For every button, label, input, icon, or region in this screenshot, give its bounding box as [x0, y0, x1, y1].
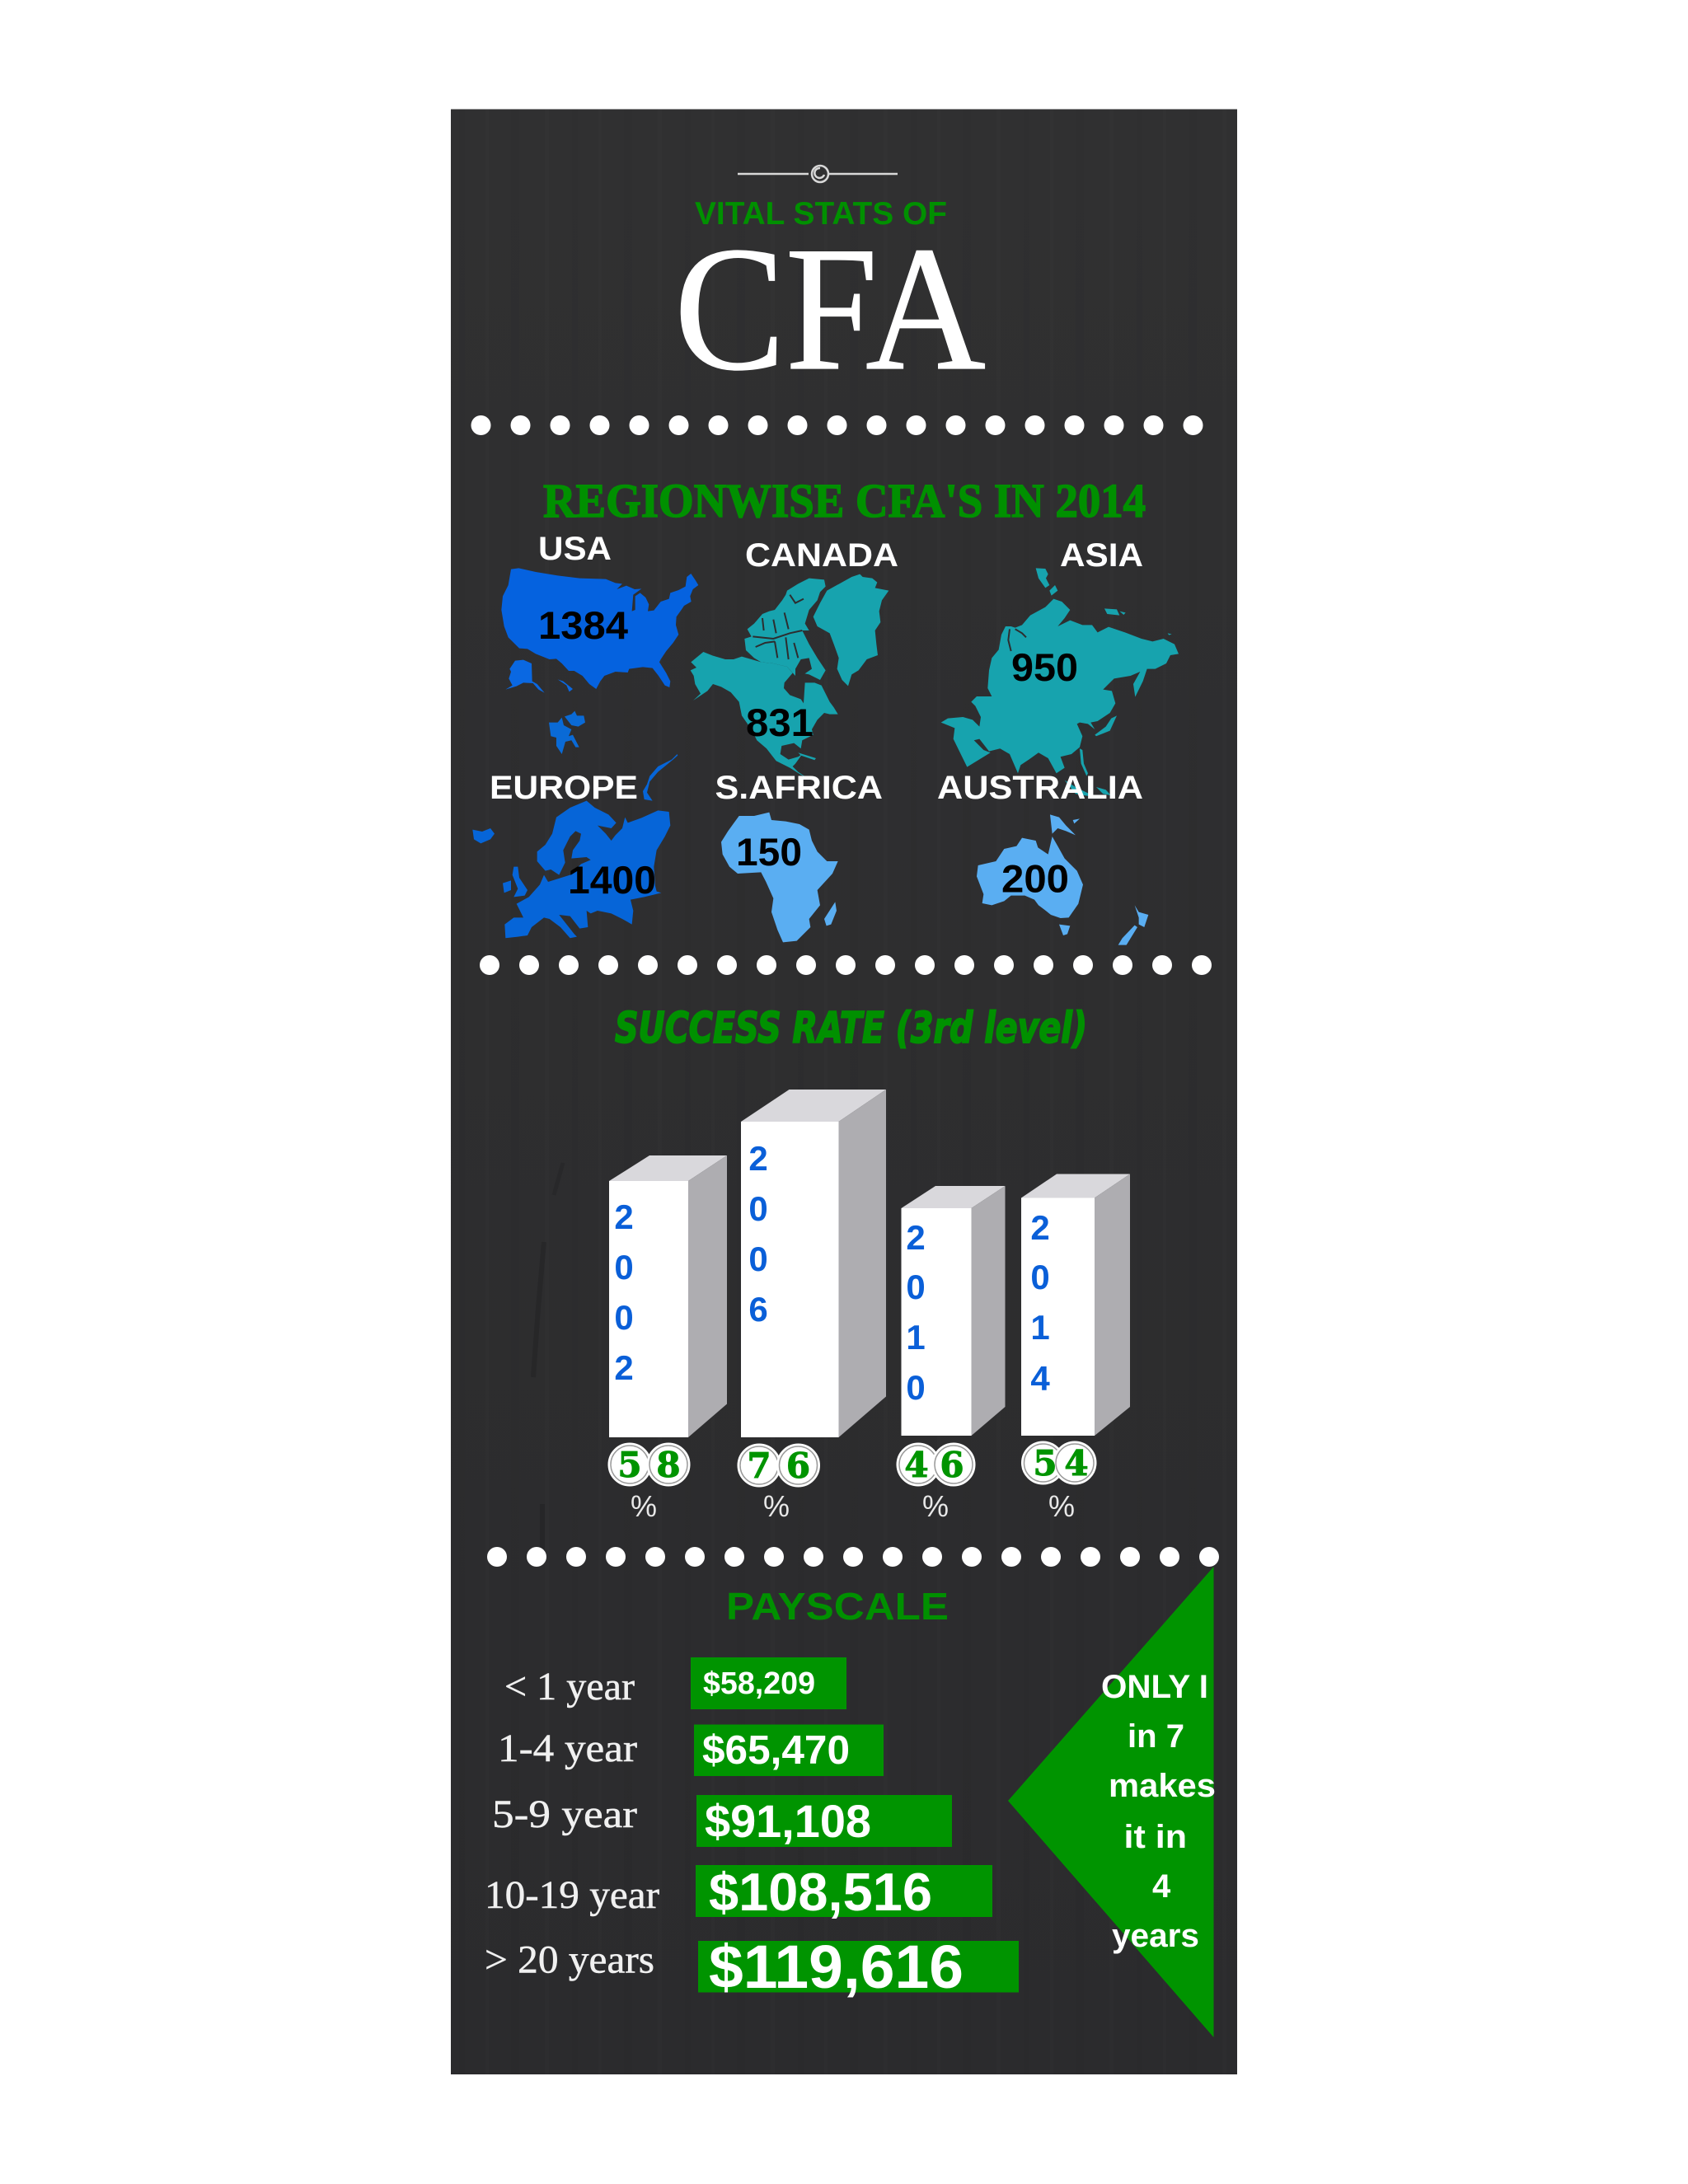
region labels	[490, 531, 1143, 806]
region values: 831	[746, 701, 814, 744]
ornament: line with swirl	[738, 166, 898, 182]
percent signs: %	[1048, 1489, 1075, 1523]
row: under 1 year: < 1 year	[504, 1665, 635, 1708]
row: over 20 years	[485, 1933, 1019, 2001]
map: Asia	[941, 568, 1179, 797]
region values: 950	[1011, 645, 1078, 689]
bar: 2010: 2	[906, 1218, 926, 1257]
percent badge: 54: 5	[1033, 1443, 1057, 1483]
region values: 200	[1001, 857, 1069, 900]
region labels: EUROPE	[490, 770, 638, 806]
percent signs: %	[763, 1489, 790, 1523]
percent signs: %	[922, 1489, 949, 1523]
row: over 20 years: > 20 years	[485, 1938, 654, 1981]
bar: 2002: 0	[614, 1298, 634, 1337]
callout text: years	[1112, 1918, 1199, 1954]
percent badge: 76	[738, 1444, 819, 1487]
percent badge: 76: 6	[786, 1446, 810, 1486]
row: 1-4 year: 1-4 year	[498, 1727, 637, 1770]
map: Australia	[977, 814, 1148, 945]
row: 1-4 year	[498, 1724, 884, 1776]
row: 5-9 year: 5-9 year	[492, 1793, 637, 1836]
bar: 2006	[741, 1090, 886, 1437]
callout text: ONLY I	[1101, 1669, 1208, 1705]
bar: 2006: 0	[748, 1189, 768, 1228]
bar: 2010	[902, 1186, 1006, 1436]
row: 5-9 year	[492, 1793, 952, 1847]
region values: 1384	[538, 603, 628, 647]
bar: 2002: 0	[614, 1248, 634, 1286]
row: 10-19 year: 10-19 year	[485, 1873, 659, 1917]
map: Europe	[472, 754, 678, 938]
percent badge: 58	[608, 1443, 690, 1486]
callout text	[1101, 1669, 1216, 1954]
bar: 2010: 1	[906, 1318, 926, 1357]
percent badge: 46: 4	[904, 1445, 929, 1485]
row: 10-19 year	[485, 1862, 992, 1922]
callout text: in 7	[1128, 1718, 1184, 1755]
region values	[538, 603, 1078, 902]
callout text: 4	[1152, 1868, 1171, 1905]
percent badge: 54	[1022, 1441, 1096, 1484]
percent badge: 46: 6	[940, 1445, 964, 1485]
region labels: CANADA	[745, 537, 898, 574]
bar: 2002	[609, 1155, 727, 1437]
bar: 2002: 2	[614, 1197, 634, 1236]
percent badge: 58: 5	[617, 1445, 642, 1485]
bar: 2014: 2	[1030, 1208, 1050, 1247]
region labels: USA	[538, 531, 612, 567]
region labels: S.AFRICA	[715, 770, 883, 806]
callout text: it in	[1124, 1819, 1187, 1855]
divider: dotted row 2	[480, 955, 1212, 975]
percent signs: %	[631, 1489, 657, 1523]
row: under 1 year: $58,209	[703, 1666, 815, 1700]
row: over 20 years: $119,616	[709, 1933, 964, 2001]
heading: payscale: PAYSCALE	[726, 1585, 949, 1628]
row: under 1 year	[504, 1657, 846, 1709]
callout text: makes	[1109, 1768, 1216, 1804]
bar: 2002: 2	[614, 1348, 634, 1387]
region labels: ASIA	[1060, 537, 1143, 574]
region values: 150	[736, 830, 802, 874]
row: 10-19 year: $108,516	[709, 1862, 932, 1922]
callout: green arrow triangle	[1008, 1567, 1213, 2037]
region values: 1400	[568, 858, 656, 902]
heading: regionwise: REGIONWISE CFA'S IN 2014	[543, 474, 1146, 527]
percent badge: 46	[897, 1443, 975, 1486]
percent signs	[631, 1489, 1075, 1523]
percent badge: 76: 7	[747, 1446, 771, 1486]
bar: 2010: 0	[906, 1268, 926, 1306]
map: USA	[501, 568, 698, 754]
percent badge: 58: 8	[656, 1445, 681, 1485]
bar: 2006: 6	[748, 1290, 768, 1329]
region labels: AUSTRALIA	[937, 770, 1143, 806]
bar: 2010: 0	[906, 1368, 926, 1407]
bar: 2014: 1	[1030, 1308, 1050, 1347]
row: 1-4 year: $65,470	[702, 1727, 850, 1773]
panel: dark chalkboard background	[451, 109, 1237, 2074]
bar: 2014: 0	[1030, 1258, 1050, 1296]
bar chart: 3D success rate bars	[609, 1090, 1130, 1437]
map: Africa	[721, 813, 838, 942]
bar: 2014	[1021, 1174, 1130, 1436]
subtitle: vital stats of: VITAL STATS OF	[695, 196, 947, 232]
row: 5-9 year: $91,108	[705, 1795, 871, 1847]
bar: 2006: 0	[748, 1240, 768, 1278]
map: Canada and Greenland	[691, 574, 889, 777]
divider: dotted row 1	[471, 415, 1203, 435]
divider: dotted row 3	[487, 1547, 1219, 1567]
bar: 2014: 4	[1030, 1359, 1050, 1398]
percent badge: 54: 4	[1064, 1443, 1089, 1483]
bar: 2006: 2	[748, 1139, 768, 1178]
title: CFA: CFA	[674, 210, 986, 407]
heading: success rate: SUCCESS RATE (3rd level)	[615, 1004, 1087, 1053]
payscale chart	[485, 1657, 1019, 2001]
